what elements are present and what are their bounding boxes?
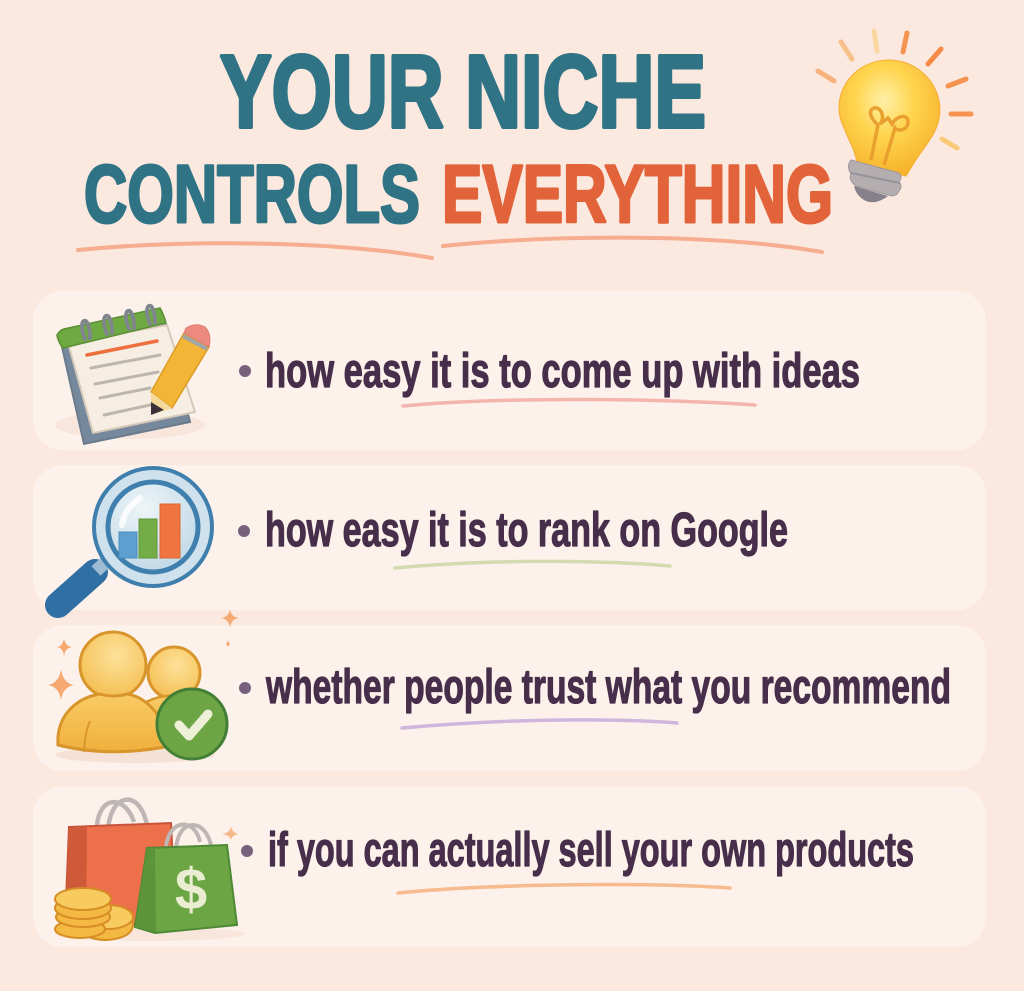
title word: EVERYTHING: EVERYTHING	[442, 149, 833, 240]
underline	[402, 720, 677, 728]
icon: light bulb	[818, 31, 971, 202]
panel: trust	[33, 609, 986, 771]
panel: ideas	[33, 291, 986, 450]
icon: people with check badge	[48, 609, 239, 763]
panel: products	[33, 786, 986, 947]
title line: YOUR NICHE: YOUR NICHE	[220, 34, 706, 149]
bullet	[239, 365, 251, 377]
bullet	[238, 525, 250, 537]
bullet	[241, 845, 253, 857]
icon: magnifier with bar chart	[58, 468, 212, 605]
title	[84, 34, 833, 240]
title underlines	[78, 238, 822, 258]
icon: shopping bags and coins	[55, 800, 245, 941]
icon: notepad and pencil	[55, 306, 210, 444]
row text: how easy it is to rank on Google	[265, 504, 788, 557]
underline	[395, 561, 670, 568]
underline	[403, 400, 755, 406]
underline	[398, 885, 730, 893]
bullet	[239, 682, 251, 694]
sparkles	[48, 609, 239, 700]
sparkle	[222, 826, 239, 840]
title word: CONTROLS: CONTROLS	[84, 149, 420, 240]
panel: rank	[33, 465, 986, 610]
coins	[55, 888, 133, 940]
dollar sign: $	[175, 857, 207, 922]
